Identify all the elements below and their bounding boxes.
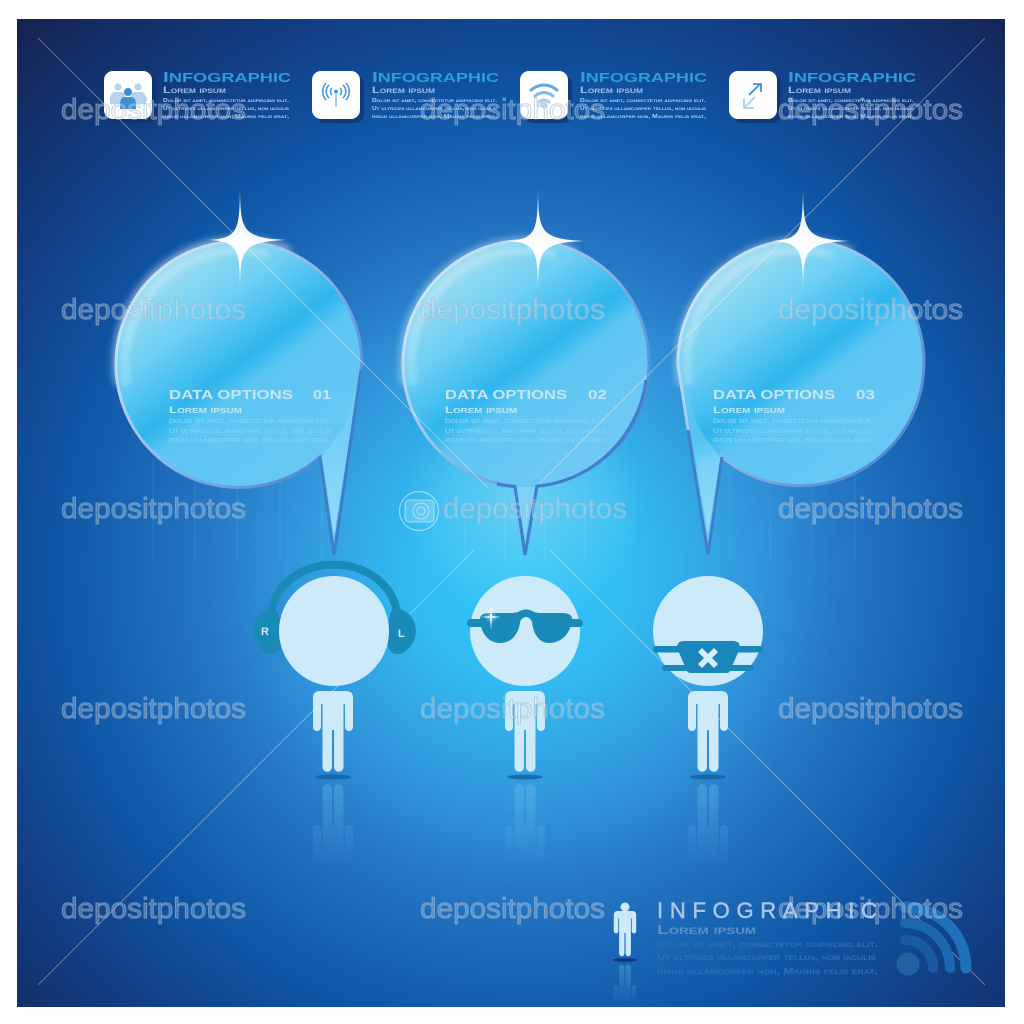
header item 3 <box>520 69 708 123</box>
watermarks: depositphotos <box>778 493 963 525</box>
subheading: Lorem ipsum <box>163 85 226 95</box>
subheading: Lorem ipsum <box>713 405 785 416</box>
heading: INFOGRAPHIC <box>788 69 917 86</box>
heading: INFOGRAPHIC <box>163 69 292 86</box>
text block: risus ullamcorper non, Mauris felis erat, <box>163 114 290 120</box>
header item 2 <box>312 69 500 123</box>
subheading: Lorem ipsum <box>788 85 851 95</box>
watermarks: depositphotos <box>778 693 963 725</box>
subheading: Lorem ipsum <box>580 85 643 95</box>
figure: person with sunglasses <box>467 576 583 865</box>
watermarks: depositphotos <box>420 94 605 126</box>
watermarks: depositphotos <box>778 94 963 126</box>
text block: risus ullamcorper non, Mauris felis erat, <box>657 966 878 976</box>
watermarks: depositphotos <box>61 294 246 326</box>
icon: wifi <box>520 71 572 123</box>
watermarks: depositphotos <box>778 294 963 326</box>
number: 01 <box>313 387 331 402</box>
sparkle <box>773 189 849 289</box>
text block: risus ullamcorper non, Mauris felis erat, <box>788 114 915 120</box>
icon: small person <box>613 902 637 1005</box>
text block: risus ullamcorper non, Mauris felis erat, <box>372 114 498 120</box>
icon: wifi signal <box>896 907 966 976</box>
icon: arrows <box>729 71 781 123</box>
icon: people <box>104 71 156 123</box>
panel: speech bubble 03 <box>678 189 924 555</box>
text block: risus ullamcorper non, Mauris felis erat, <box>713 437 873 444</box>
panel: speech bubble 01 <box>116 188 362 555</box>
figure: person with headphones <box>253 565 416 865</box>
text block <box>163 98 290 120</box>
heading: INFOGRAPHIC <box>657 898 877 923</box>
text block: Dolor sit amet, consectetur adipiscing elit. <box>713 418 873 425</box>
text block: risus ullamcorper non, Mauris felis erat, <box>169 437 331 444</box>
text block: Dolor sit amet, consectetur adipiscing elit. <box>788 98 915 104</box>
heading: DATA OPTIONS <box>713 387 835 402</box>
sparkle <box>508 189 584 289</box>
figure: person with headphones: L <box>398 628 405 640</box>
number: 02 <box>588 387 607 402</box>
watermarks: depositphotos <box>420 893 605 925</box>
text block: Dolor sit amet, consectetur adipiscing elit. <box>657 939 878 949</box>
text block: Dolor sit amet, consectetur adipiscing elit. <box>445 418 607 425</box>
number: 03 <box>856 387 875 402</box>
text block: Ut ultrices ullamcorper tellus, non iaculis <box>445 428 608 435</box>
text block: risus ullamcorper non, Mauris felis erat, <box>580 114 707 120</box>
text block: Ut ultrices ullamcorper tellus, non iaculis <box>580 106 706 112</box>
heading: INFOGRAPHIC <box>580 69 708 86</box>
heading: DATA OPTIONS <box>169 387 293 402</box>
watermarks: depositphotos <box>420 294 605 326</box>
watermarks <box>61 94 963 925</box>
text block <box>445 418 608 444</box>
footer block <box>613 898 966 1005</box>
text block: Ut ultrices ullamcorper tellus, non iaculis <box>788 106 914 112</box>
watermarks: depositphotos <box>443 493 627 525</box>
text block: Ut ultrices ullamcorper tellus, non iaculis <box>163 106 289 112</box>
text block: Dolor sit amet, consectetur adipiscing elit. <box>372 98 498 104</box>
text block: Ut ultrices ullamcorper tellus, non iaculis <box>713 428 874 435</box>
text block <box>713 418 874 444</box>
text block: Dolor sit amet, consectetur adipiscing elit. <box>169 418 331 425</box>
heading: DATA OPTIONS <box>445 387 567 402</box>
watermarks: depositphotos <box>61 94 246 126</box>
heading: INFOGRAPHIC <box>372 69 500 86</box>
text block <box>580 98 707 120</box>
text block: Dolor sit amet, consectetur adipiscing elit. <box>163 98 290 104</box>
watermarks: depositphotos <box>778 893 963 925</box>
header item 4 <box>729 69 917 123</box>
text block <box>788 98 915 120</box>
watermarks: depositphotos <box>61 893 246 925</box>
subheading: Lorem ipsum <box>445 405 517 416</box>
icon: antenna <box>312 71 364 123</box>
text block <box>169 418 332 444</box>
watermarks: depositphotos <box>61 693 246 725</box>
subheading: Lorem ipsum <box>169 405 242 416</box>
text block: Dolor sit amet, consectetur adipiscing elit. <box>580 98 707 104</box>
figure: person with headphones: R <box>261 626 269 638</box>
text block: Ut ultrices ullamcorper tellus, non iaculis <box>657 952 876 962</box>
figure: person with mask <box>653 576 763 865</box>
sparkle <box>210 188 286 288</box>
text block <box>657 939 878 976</box>
text block: risus ullamcorper non, Mauris felis erat, <box>445 437 607 444</box>
watermarks: depositphotos <box>61 493 246 525</box>
text block: Ut ultrices ullamcorper tellus, non iaculis <box>372 106 497 112</box>
header item 1 <box>104 69 292 123</box>
subheading: Lorem ipsum <box>372 85 435 95</box>
text block <box>372 98 498 120</box>
watermarks: depositphotos <box>420 693 605 725</box>
panel: speech bubble 02 <box>403 189 649 555</box>
text block: Ut ultrices ullamcorper tellus, non iaculis <box>169 428 332 435</box>
subheading: Lorem ipsum <box>657 922 756 937</box>
